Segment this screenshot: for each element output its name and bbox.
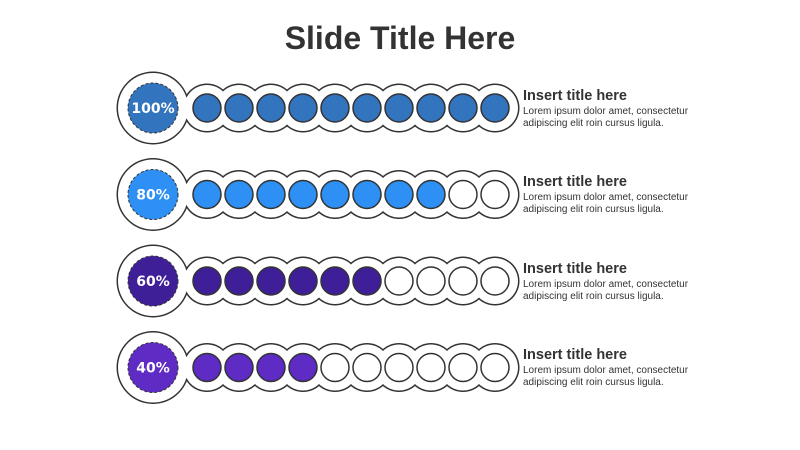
text block 3: adipiscing elit roin cursus ligula.	[523, 291, 664, 302]
text block 4: adipiscing elit roin cursus ligula.	[523, 377, 664, 388]
text block 3	[523, 261, 688, 302]
row 1: 100%	[116, 72, 520, 144]
text block 4: Lorem ipsum dolor amet, consectetur	[523, 365, 688, 376]
text block 1	[523, 88, 688, 129]
row 2: 80%: 80%	[136, 188, 170, 204]
text block 4	[523, 347, 688, 388]
row 4: 40%: 40%	[136, 360, 170, 376]
row 3: 60%	[116, 244, 520, 318]
text block 1: adipiscing elit roin cursus ligula.	[523, 118, 664, 129]
text block 1: Insert title here	[523, 88, 627, 104]
text block 2: Lorem ipsum dolor amet, consectetur	[523, 192, 688, 203]
text block 2: adipiscing elit roin cursus ligula.	[523, 204, 664, 215]
row 2: 80%	[116, 158, 520, 231]
text block 2	[523, 174, 688, 215]
row 3: 60%: 60%	[136, 274, 170, 290]
row 1: 100%: 100%	[131, 101, 175, 117]
text block 4: Insert title here	[523, 347, 627, 363]
row 4: 40%	[116, 331, 520, 404]
text block 2: Insert title here	[523, 174, 627, 190]
text block 1: Lorem ipsum dolor amet, consectetur	[523, 106, 688, 117]
text block 3: Insert title here	[523, 261, 627, 277]
title: Slide Title Here	[285, 20, 515, 56]
text block 3: Lorem ipsum dolor amet, consectetur	[523, 279, 688, 290]
